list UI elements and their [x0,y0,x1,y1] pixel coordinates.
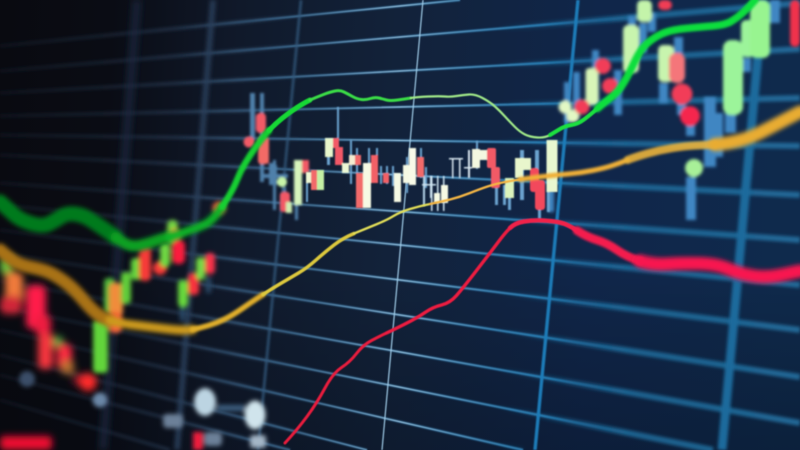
right candlesticks [548,0,800,220]
left candlesticks [0,257,97,391]
centre candlesticks [306,107,558,220]
centre candle bodies [306,138,558,210]
bottom left red blob [0,436,52,450]
near left candlesticks [93,202,226,373]
green moving average [0,0,755,246]
red moving average [285,220,800,443]
right candle bodies [558,0,800,177]
blurred wicks [250,93,298,220]
right wicks [548,0,780,220]
far-left candlesticks of centre cluster [244,93,309,220]
bottom controls [19,371,266,450]
blurred bodies [244,113,309,213]
orange moving average [0,112,800,330]
centre wicks [306,107,550,220]
